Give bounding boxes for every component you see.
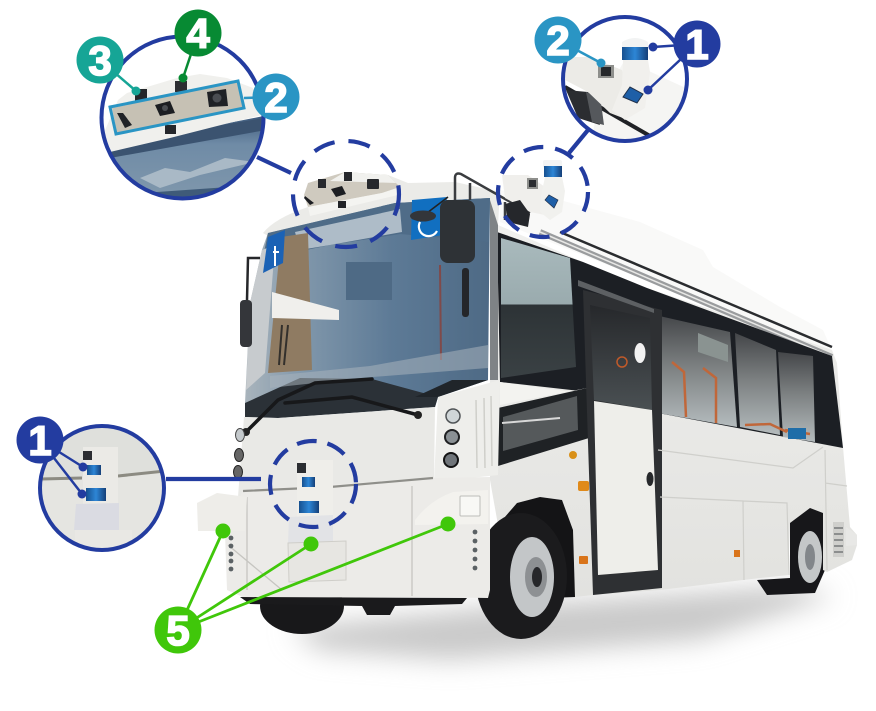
callout 1 (roof lidar): 1	[685, 21, 709, 68]
ground shadow	[290, 586, 835, 660]
front wheel	[475, 497, 575, 639]
left bumper sensor	[197, 493, 247, 531]
left mirror	[240, 258, 260, 347]
side window band	[497, 232, 843, 448]
side vent	[833, 522, 844, 557]
callout 3 (roof pod): 3	[88, 37, 112, 84]
side window panes	[501, 238, 815, 442]
callout 2 (roof pod): 2	[264, 74, 288, 121]
callout 3 (roof pod)	[76, 36, 140, 96]
bumper	[225, 477, 490, 598]
side marker lights	[569, 451, 740, 564]
callout 4 (roof pod): 4	[186, 10, 210, 57]
front lidar column on bus	[288, 460, 346, 582]
inset: roof lidar close-up	[565, 38, 684, 139]
roof lidar unit on bus	[502, 160, 565, 227]
white diagonal band	[500, 382, 587, 405]
front lower panel	[238, 407, 435, 497]
right LED row	[473, 530, 477, 570]
dashed highlight: front lidar	[270, 441, 356, 527]
right bumper sensor	[415, 490, 488, 525]
windshield top tint	[262, 198, 490, 262]
callout 2 (roof lidar): 2	[546, 17, 570, 64]
front right lamps	[444, 409, 460, 467]
windshield left reflection	[246, 233, 441, 390]
roof sensor pod on bus	[304, 172, 402, 216]
dashed highlight: roof lidar	[498, 147, 588, 237]
camera band highlight	[110, 81, 244, 134]
windshield low light	[270, 345, 488, 388]
inset ring: front lidar	[40, 426, 164, 550]
callout 1 (roof lidar)	[644, 20, 720, 94]
chrome strip	[243, 478, 433, 491]
under-bumper shadow	[240, 597, 467, 615]
sign: pedestrian	[263, 230, 285, 273]
leader: roof lidar inset	[569, 130, 588, 153]
callout 1 (front lidar)	[16, 416, 88, 498]
sign: wheelchair	[411, 197, 447, 240]
left LED row	[229, 536, 233, 571]
callout 4 (roof pod)	[174, 10, 222, 82]
inset ring: roof pod	[102, 36, 264, 198]
roof rack and mirror arm	[455, 174, 530, 220]
side panel seams	[658, 447, 847, 580]
hood reflection	[415, 380, 488, 397]
windshield sky reflection	[295, 209, 402, 250]
leader: front lidar inset	[166, 477, 261, 481]
headlight pod	[434, 380, 500, 482]
bus illustration	[197, 160, 857, 639]
front-left wheel	[260, 578, 344, 634]
roof rail dark line	[560, 232, 832, 347]
callout 5 (bumper sensors): 5	[166, 607, 190, 654]
front corner pillar	[490, 200, 498, 380]
windshield	[245, 198, 490, 418]
lower side pane	[498, 388, 589, 466]
right mirror	[410, 197, 475, 317]
front cap	[263, 172, 500, 236]
inset ring: roof lidar	[563, 17, 687, 141]
inset: front lidar close-up	[42, 428, 162, 548]
wipers	[245, 379, 418, 433]
leader: roof pod inset	[257, 157, 291, 173]
roof rail stripes	[540, 232, 832, 357]
callout 1 (front lidar): 1	[28, 417, 52, 464]
roof	[500, 190, 833, 353]
wiper pivots	[242, 411, 422, 436]
callout 5 (bumper sensors)	[154, 516, 456, 654]
inset: roof sensor pod close-up	[104, 74, 262, 196]
windshield lower dark band	[245, 378, 438, 418]
front left lamps	[234, 428, 244, 478]
bumper seams	[228, 486, 412, 596]
vent ribs	[476, 396, 492, 468]
rear bumper end	[846, 527, 857, 546]
door	[578, 280, 662, 595]
callout 2 (roof lidar)	[534, 16, 606, 68]
rear wheel	[757, 505, 825, 595]
bus side body	[490, 225, 857, 597]
callout 2 (roof pod)	[244, 74, 300, 121]
dashed highlight: roof pod	[293, 141, 399, 247]
